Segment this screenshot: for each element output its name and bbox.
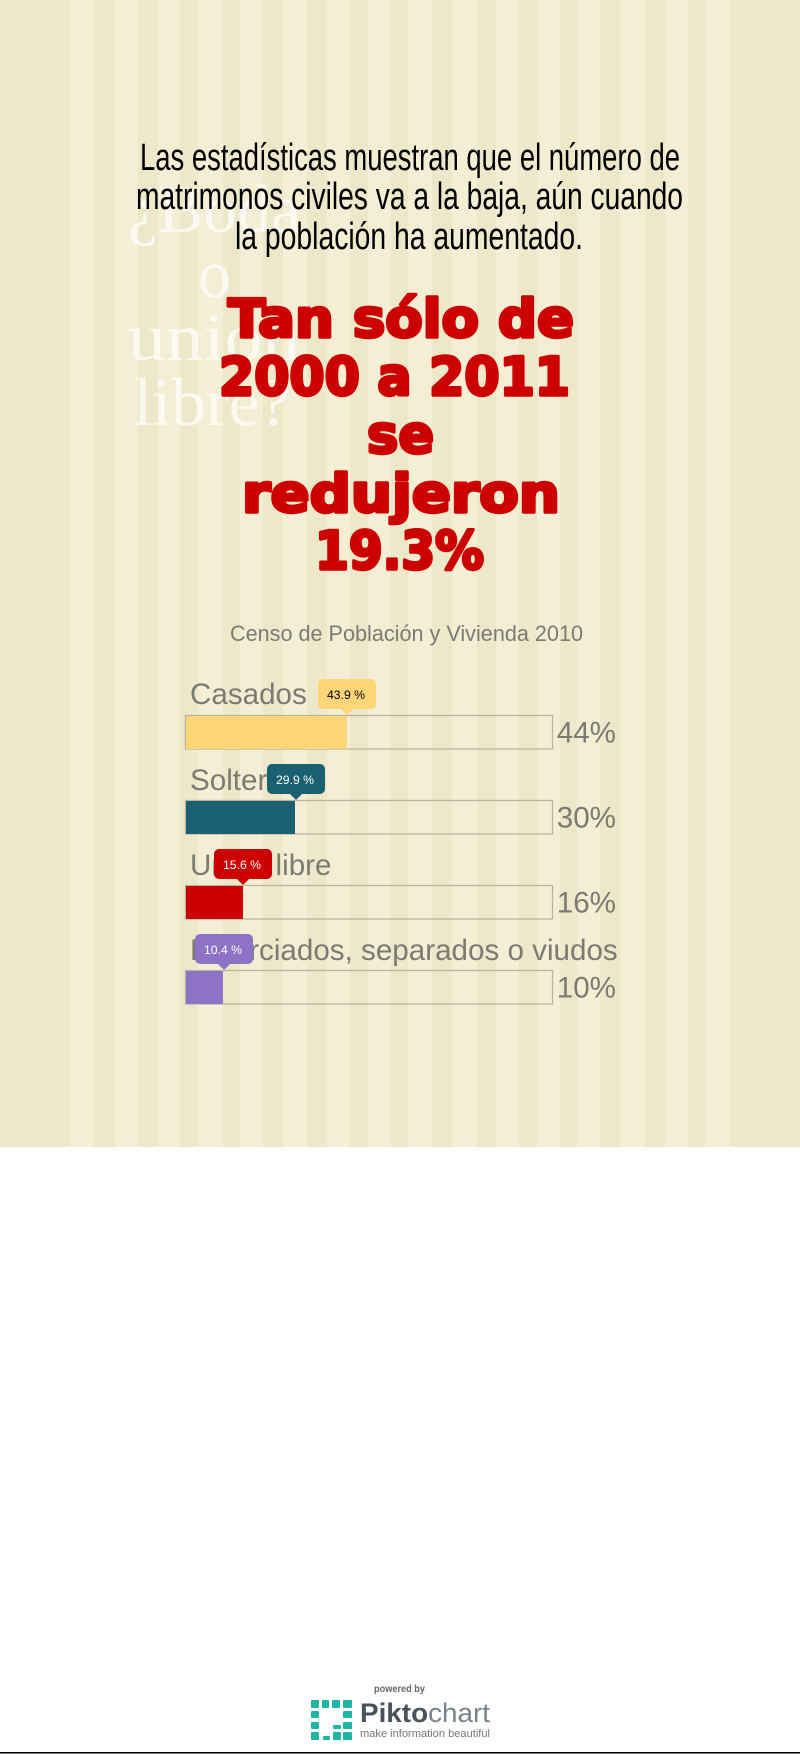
row: Solteros <box>186 764 616 834</box>
row: Divorciados, separados o viudos: 10.4 % <box>204 943 242 957</box>
red headline: Tan sólo de 2000 a 2011 se redujeron 19.3%: Tan sólo de <box>228 289 574 350</box>
row: Divorciados, separados o viudos: 10% <box>557 972 616 1004</box>
striped background panel <box>0 0 800 1147</box>
red headline: Tan sólo de 2000 a 2011 se redujeron 19.3%: redujeron <box>242 464 560 525</box>
row: Divorciados, separados o viudos: Divorciados, separados o viudos <box>190 934 618 967</box>
red headline: Tan sólo de 2000 a 2011 se redujeron 19.3%: 2000 a 2011 <box>219 347 570 408</box>
tagline: make information beautiful <box>360 1728 490 1740</box>
white title: ¿Boda o unión libre?: ¿Boda <box>128 171 301 247</box>
row: Solteros: Solteros <box>190 764 299 797</box>
intro text block: la población ha aumentado. <box>235 216 583 258</box>
Piktochart wordmark: Piktochart <box>360 1698 491 1728</box>
red headline: Tan sólo de 2000 a 2011 se redujeron 19.3%: 19.3% <box>315 521 484 582</box>
row: Casados <box>186 678 616 750</box>
row: Divorciados, separados o viudos <box>186 934 618 1004</box>
row: Unión libre: Unión libre <box>190 849 331 882</box>
powered by label: powered by <box>374 1683 425 1695</box>
red headline: Tan sólo de 2000 a 2011 se redujeron 19.3% <box>219 289 574 582</box>
icon: Piktochart tile mark <box>311 1700 352 1740</box>
row: Unión libre: 16% <box>557 886 616 920</box>
row: Solteros: 29.9 % <box>276 773 314 787</box>
row: Casados: Casados <box>190 678 307 711</box>
row: Unión libre: 15.6 % <box>223 858 261 872</box>
red headline: Tan sólo de 2000 a 2011 se redujeron 19.3%: se <box>367 405 434 466</box>
row: Casados: 43.9 % <box>327 688 365 702</box>
white title: ¿Boda o unión libre?: unión <box>128 299 300 375</box>
Piktochart footer logo <box>311 1683 491 1740</box>
white title: ¿Boda o unión libre?: libre? <box>133 364 290 440</box>
chart title: Censo de Población y Vivienda 2010 <box>230 621 583 646</box>
white title: ¿Boda o unión libre?: o <box>198 236 231 312</box>
white title: ¿Boda o unión libre? <box>128 171 301 440</box>
row: Casados: 44% <box>557 716 616 750</box>
row: Solteros: 30% <box>557 802 616 834</box>
intro text block <box>136 137 683 258</box>
bar chart <box>186 678 618 1004</box>
row: Unión libre <box>186 849 616 920</box>
